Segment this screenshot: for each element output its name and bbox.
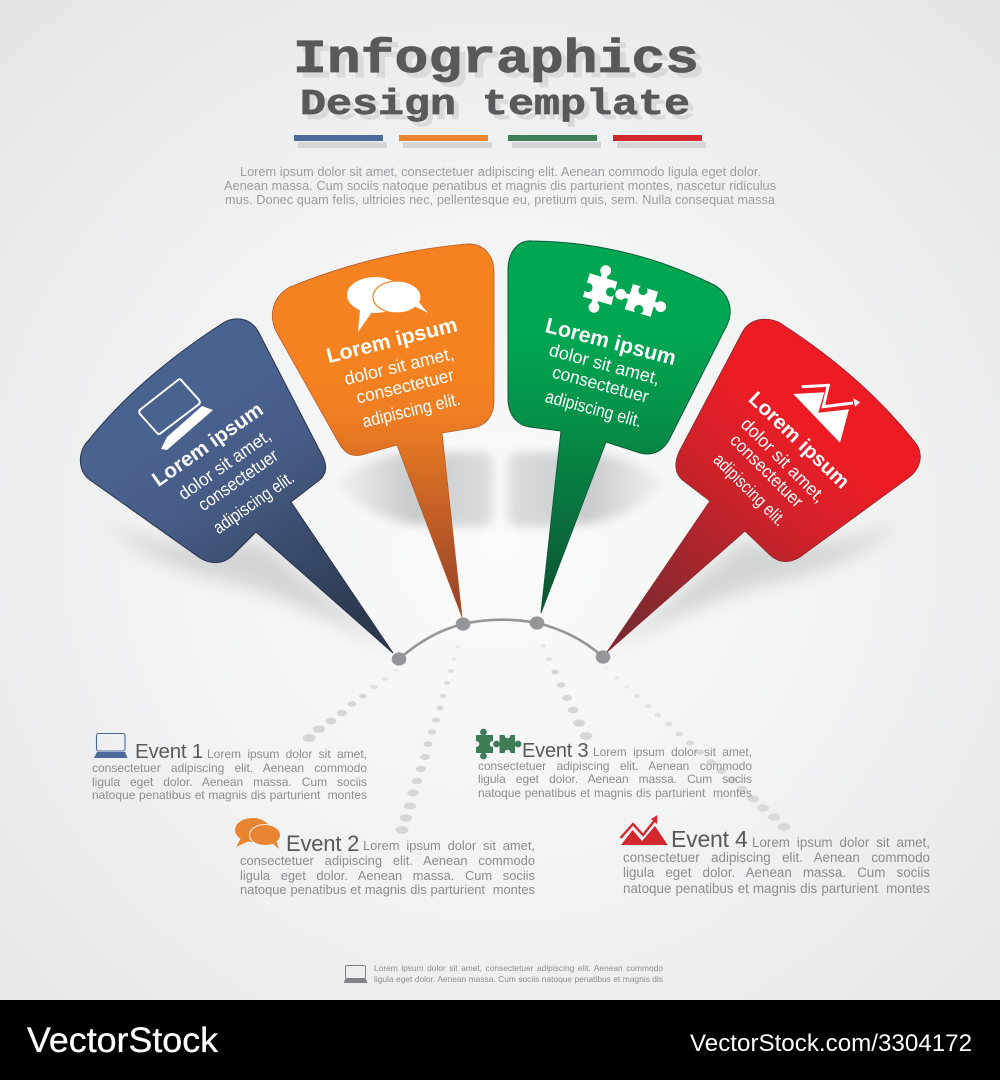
green bubble text xyxy=(543,313,679,431)
blue bubble text xyxy=(148,398,298,538)
watermark logo: VectorStock xyxy=(27,1020,218,1060)
dotted trail 1 xyxy=(302,668,399,742)
event 1 text xyxy=(92,740,367,802)
green bubble text: consectetuer xyxy=(550,362,651,407)
dotted trail 2 xyxy=(396,645,461,834)
orange bubble text xyxy=(324,313,462,432)
title: Design template xyxy=(305,89,695,130)
event 2 text xyxy=(240,831,535,897)
red bubble text: dolor sit amet, xyxy=(737,414,830,507)
bubble shadows xyxy=(105,452,900,652)
event 1 text: natoque penatibus et magnis dis parturient montes xyxy=(92,788,367,802)
intro text block xyxy=(224,164,776,207)
footer note text: Lorem ipsum dolor sit amet, consectetuer adipiscing elit. Aenean commodo xyxy=(374,963,663,973)
panel: orange bubble xyxy=(272,244,494,617)
icon: speech bubbles xyxy=(347,277,428,332)
event 2 text: ligula eget dolor. Aenean massa. Cum sociis xyxy=(240,868,535,883)
event 1 text: Event 1 xyxy=(135,740,203,763)
event 2 text: Lorem ipsum dolor sit amet, xyxy=(363,838,535,853)
icon: laptop xyxy=(139,379,213,450)
green bubble text: Lorem ipsum xyxy=(543,313,679,370)
icon: event 4 rising chart xyxy=(620,815,668,845)
blue bubble text: consectetuer xyxy=(194,445,282,515)
intro text block: mus. Donec quam felis, ultricies nec, pellentesque eu, pretium quis, sem. Nulla consequat massa xyxy=(225,192,775,207)
event 3 text: consectetuer adipiscing elit. Aenean commodo xyxy=(478,759,752,773)
event 2 text: Event 2 xyxy=(286,831,359,856)
title: Infographics xyxy=(299,39,705,92)
event 4 text: consectetuer adipiscing elit. Aenean commodo xyxy=(623,850,930,865)
green bubble text: dolor sit amet, xyxy=(547,340,662,389)
event 4 text: Lorem ipsum dolor sit amet, xyxy=(752,835,930,850)
panel: green bubble xyxy=(508,241,730,613)
event 4 text: Event 4 xyxy=(671,826,748,852)
event 3 text: natoque penatibus et magnis dis parturient montes xyxy=(478,786,752,800)
red bubble text: adipiscing elit. xyxy=(709,449,790,530)
blue bubble text: Lorem ipsum xyxy=(148,398,268,491)
event 3 text: Lorem ipsum dolor sit amet, xyxy=(593,745,752,759)
event 4 text: ligula eget dolor. Aenean massa. Cum sociis xyxy=(623,865,930,880)
icon: puzzle pieces xyxy=(583,265,666,317)
event 3 text xyxy=(478,740,752,800)
dotted trail 4 xyxy=(604,666,790,831)
title xyxy=(293,34,705,130)
event 2 text: natoque penatibus et magnis dis parturient montes xyxy=(240,882,535,897)
icon: footer laptop xyxy=(344,966,368,983)
icon: event 1 laptop xyxy=(94,734,128,758)
event 4 text: natoque penatibus et magnis dis parturient montes xyxy=(623,881,930,896)
blue bubble text: adipiscing elit. xyxy=(209,467,298,538)
icon: event 3 puzzle pieces xyxy=(474,729,521,759)
event 3 text: Event 3 xyxy=(522,740,588,762)
intro text block: Lorem ipsum dolor sit amet, consectetuer adipiscing elit. Aenean commodo ligula eget dolor. xyxy=(240,164,761,179)
icon: rising chart xyxy=(793,385,860,443)
event 3 text: ligula eget dolor. Aenean massa. Cum sociis xyxy=(478,772,752,786)
icon: event 2 speech bubbles xyxy=(235,818,280,849)
event 1 text: ligula eget dolor. Aenean massa. Cum sociis xyxy=(92,775,367,789)
orange bubble text: Lorem ipsum xyxy=(324,313,460,368)
event 1 text: Lorem ipsum dolor sit amet, xyxy=(207,747,367,761)
footer note text: ligula eget dolor. Aenean massa. Cum sociis natoque penatibus et magnis dis xyxy=(374,974,663,984)
blue bubble text: dolor sit amet, xyxy=(175,425,275,504)
panel: red bubble xyxy=(607,319,920,652)
event 4 text xyxy=(623,826,930,896)
footer note text xyxy=(374,963,663,984)
orange bubble text: consectetuer xyxy=(354,365,456,408)
orange bubble text: dolor sit amet, xyxy=(342,343,456,389)
intro text block: Aenean massa. Cum sociis natoque penatibus et magnis dis parturient montes, nascetur ridiculus xyxy=(224,178,776,193)
event 1 text: consectetuer adipiscing elit. Aenean commodo xyxy=(92,761,367,775)
red bubble text xyxy=(709,387,854,530)
dotted trail 3 xyxy=(540,644,592,740)
colour bars under title xyxy=(294,135,706,148)
red bubble text: consectetuer xyxy=(726,430,807,511)
watermark url: VectorStock.com/3304172 xyxy=(690,1030,972,1057)
timeline arc with nodes xyxy=(392,616,610,666)
black footer band xyxy=(0,1000,1000,1080)
title: Infographics xyxy=(293,34,699,87)
title: Design template xyxy=(300,84,690,125)
orange bubble text: adipiscing elit. xyxy=(360,389,462,432)
panel: blue bubble xyxy=(80,319,393,653)
red bubble text: Lorem ipsum xyxy=(744,387,854,493)
green bubble text: adipiscing elit. xyxy=(543,386,644,431)
event 2 text: consectetuer adipiscing elit. Aenean commodo xyxy=(240,853,535,868)
